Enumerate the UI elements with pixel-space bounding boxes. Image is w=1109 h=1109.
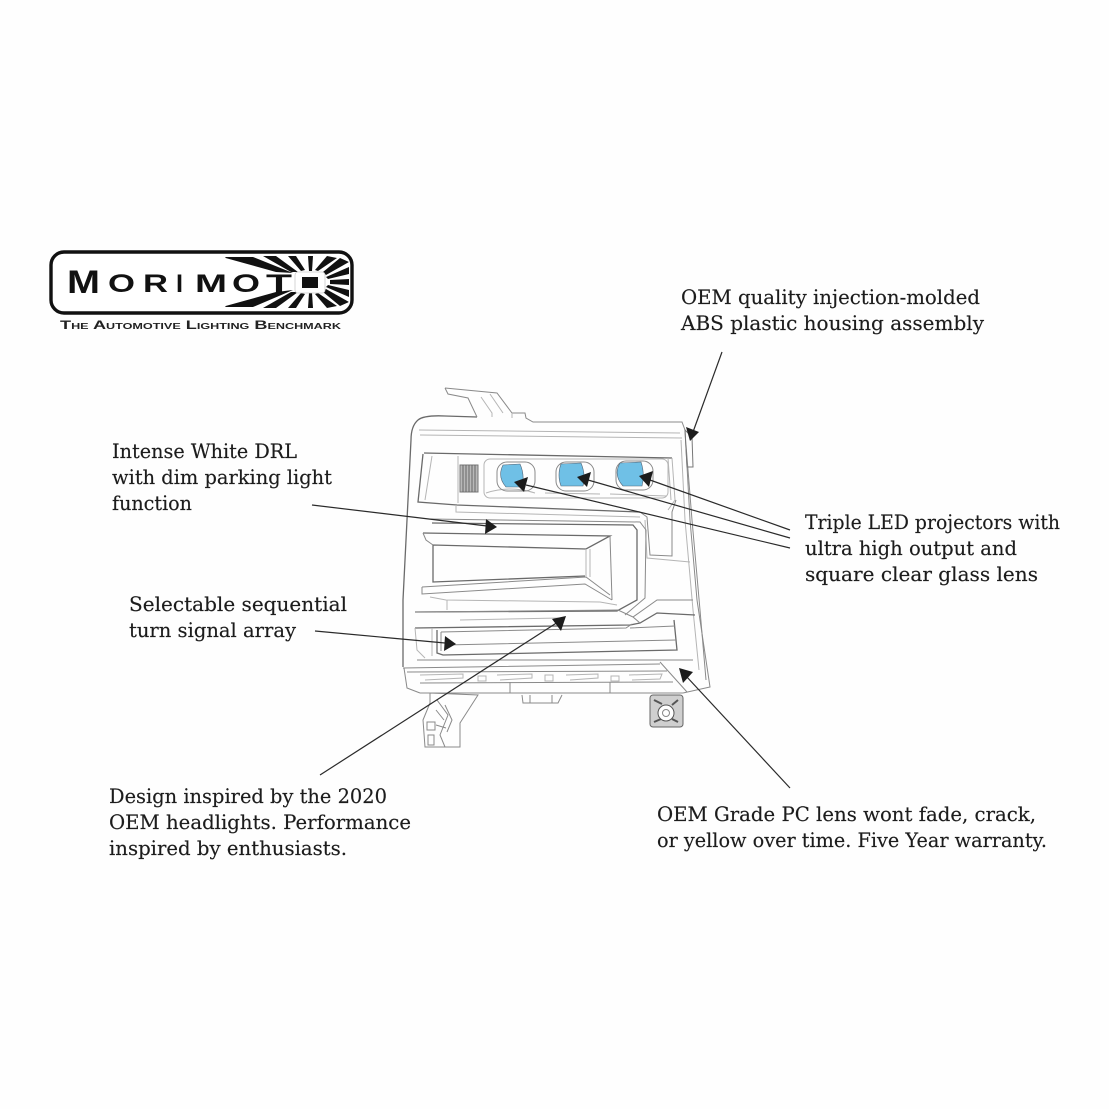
blue lens 2 [559, 463, 584, 486]
logo wordmark: M [195, 270, 227, 298]
arrow: turn signal [315, 631, 456, 651]
arrow: design [320, 616, 566, 775]
callout: design: Design inspired by the 2020 [109, 785, 387, 808]
center tab [522, 695, 562, 703]
right bracket [650, 695, 683, 727]
logo sunburst [222, 256, 349, 308]
logo frame [51, 252, 352, 313]
callout: DRL: with dim parking light [112, 466, 332, 489]
callout: housing: ABS plastic housing assembly [680, 312, 984, 335]
callout: turn signal [129, 593, 347, 642]
arrow: projector 3 [639, 471, 790, 530]
callout: projectors: square clear glass lens [805, 563, 1038, 586]
vent grille [460, 465, 478, 492]
logo wordmark: R [143, 270, 168, 298]
lower trim and mounting tabs [403, 660, 693, 747]
callout: lens: or yellow over time. Five Year warranty. [657, 829, 1047, 852]
arrow: housing [686, 352, 722, 441]
callout: design [109, 785, 411, 860]
callout: projectors [805, 511, 1060, 586]
projector frames [497, 462, 535, 491]
callout: projectors: Triple LED projectors with [805, 511, 1060, 534]
callout: projectors: ultra high output and [805, 537, 1017, 560]
callout: DRL [112, 440, 332, 515]
logo wordmark: M [67, 264, 100, 300]
callout: lens: OEM Grade PC lens wont fade, crack, [657, 803, 1036, 826]
callout: DRL: function [112, 492, 192, 515]
callout: design: inspired by enthusiasts. [109, 837, 347, 860]
DRL light bar [415, 519, 646, 620]
logo wordmark [67, 264, 292, 300]
blue lens 1 [501, 464, 523, 487]
arrow: lens [679, 668, 790, 788]
arrow: DRL [312, 505, 497, 534]
logo wordmark: T [266, 270, 292, 298]
blue lens 3 [617, 462, 643, 486]
projector bay [418, 453, 690, 562]
housing outline [403, 388, 710, 693]
logo wordmark: O [232, 270, 260, 298]
arrow: projector 1 [514, 477, 790, 548]
logo wordmark: O [108, 270, 135, 298]
callout: housing [680, 286, 984, 335]
logo: Morimoto [51, 252, 352, 332]
callout: DRL: Intense White DRL [112, 440, 297, 463]
turn signal array [415, 600, 695, 658]
callout: design: OEM headlights. Performance [109, 811, 411, 834]
callout: turn signal: turn signal array [129, 619, 296, 642]
callout: housing: OEM quality injection-molded [681, 286, 980, 309]
headlight line drawing [403, 388, 710, 747]
logo tagline: The Automotive Lighting Benchmark [60, 320, 341, 332]
logo wordmark: I [176, 270, 183, 298]
callout: turn signal: Selectable sequential [129, 593, 347, 616]
callout: lens [657, 803, 1047, 852]
arrow: projector 2 [577, 472, 790, 538]
left bracket [423, 693, 478, 747]
